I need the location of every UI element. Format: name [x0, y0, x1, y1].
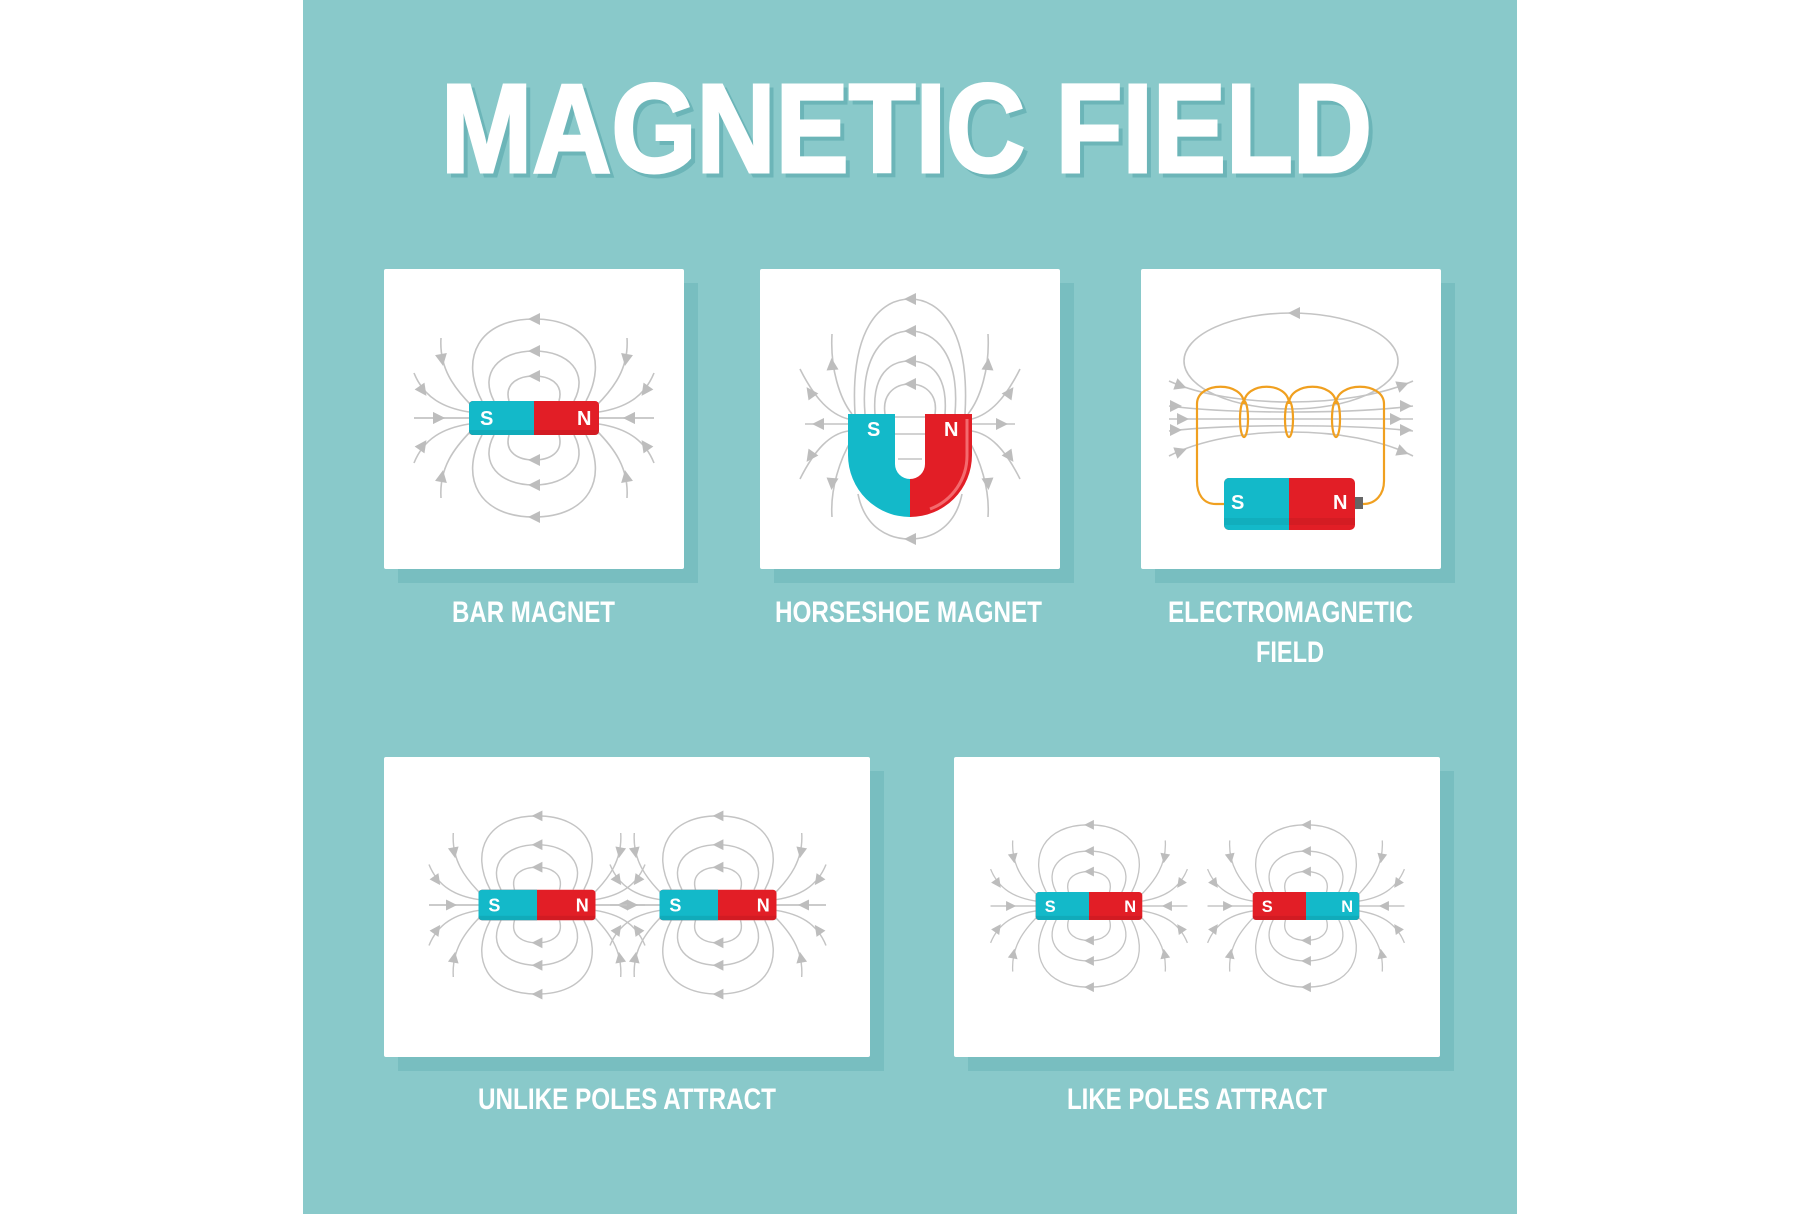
panel: electromagnetic field [1141, 269, 1455, 583]
horseshoe magnet: S [867, 419, 880, 441]
label: horseshoe magnet: HORSESHOE MAGNET [775, 596, 1042, 629]
panel: like poles: S [1262, 898, 1273, 916]
panel: bar magnet [384, 269, 698, 583]
panel: like poles [954, 757, 1454, 1071]
title: MAGNETIC FIELD [441, 58, 1372, 199]
label: electromagnetic field: ELECTROMAGNETIC [1168, 596, 1413, 629]
label: electromagnetic field: FIELD [1256, 636, 1324, 669]
panel: unlike poles: N [576, 895, 589, 915]
panel: like poles: N [1124, 898, 1136, 916]
coil [1197, 387, 1384, 504]
label: like poles: LIKE POLES ATTRACT [1067, 1083, 1327, 1116]
battery [1224, 478, 1363, 530]
panel: unlike poles [384, 757, 884, 1071]
bar magnet diagram: N [577, 408, 591, 430]
battery: N [1333, 492, 1347, 514]
panel: unlike poles: S [488, 895, 500, 915]
horseshoe magnet [848, 414, 972, 517]
panel: unlike poles: S [669, 895, 681, 915]
horseshoe magnet: N [944, 419, 958, 441]
background panel [303, 0, 1517, 1214]
label: bar magnet: BAR MAGNET [452, 596, 615, 629]
panel: like poles: N [1341, 898, 1353, 916]
label: electromagnetic field [1168, 596, 1413, 669]
label: unlike poles: UNLIKE POLES ATTRACT [478, 1083, 776, 1116]
bar magnet diagram: S [480, 408, 493, 430]
horseshoe field lines [800, 299, 1020, 539]
panel: like poles: S [1045, 898, 1056, 916]
panel: horseshoe magnet [760, 269, 1074, 583]
field lines [1169, 313, 1413, 456]
battery: S [1231, 492, 1244, 514]
panel: unlike poles: N [757, 895, 770, 915]
title: MAGNETIC FIELD [445, 62, 1376, 203]
bar magnet diagram [414, 313, 654, 523]
